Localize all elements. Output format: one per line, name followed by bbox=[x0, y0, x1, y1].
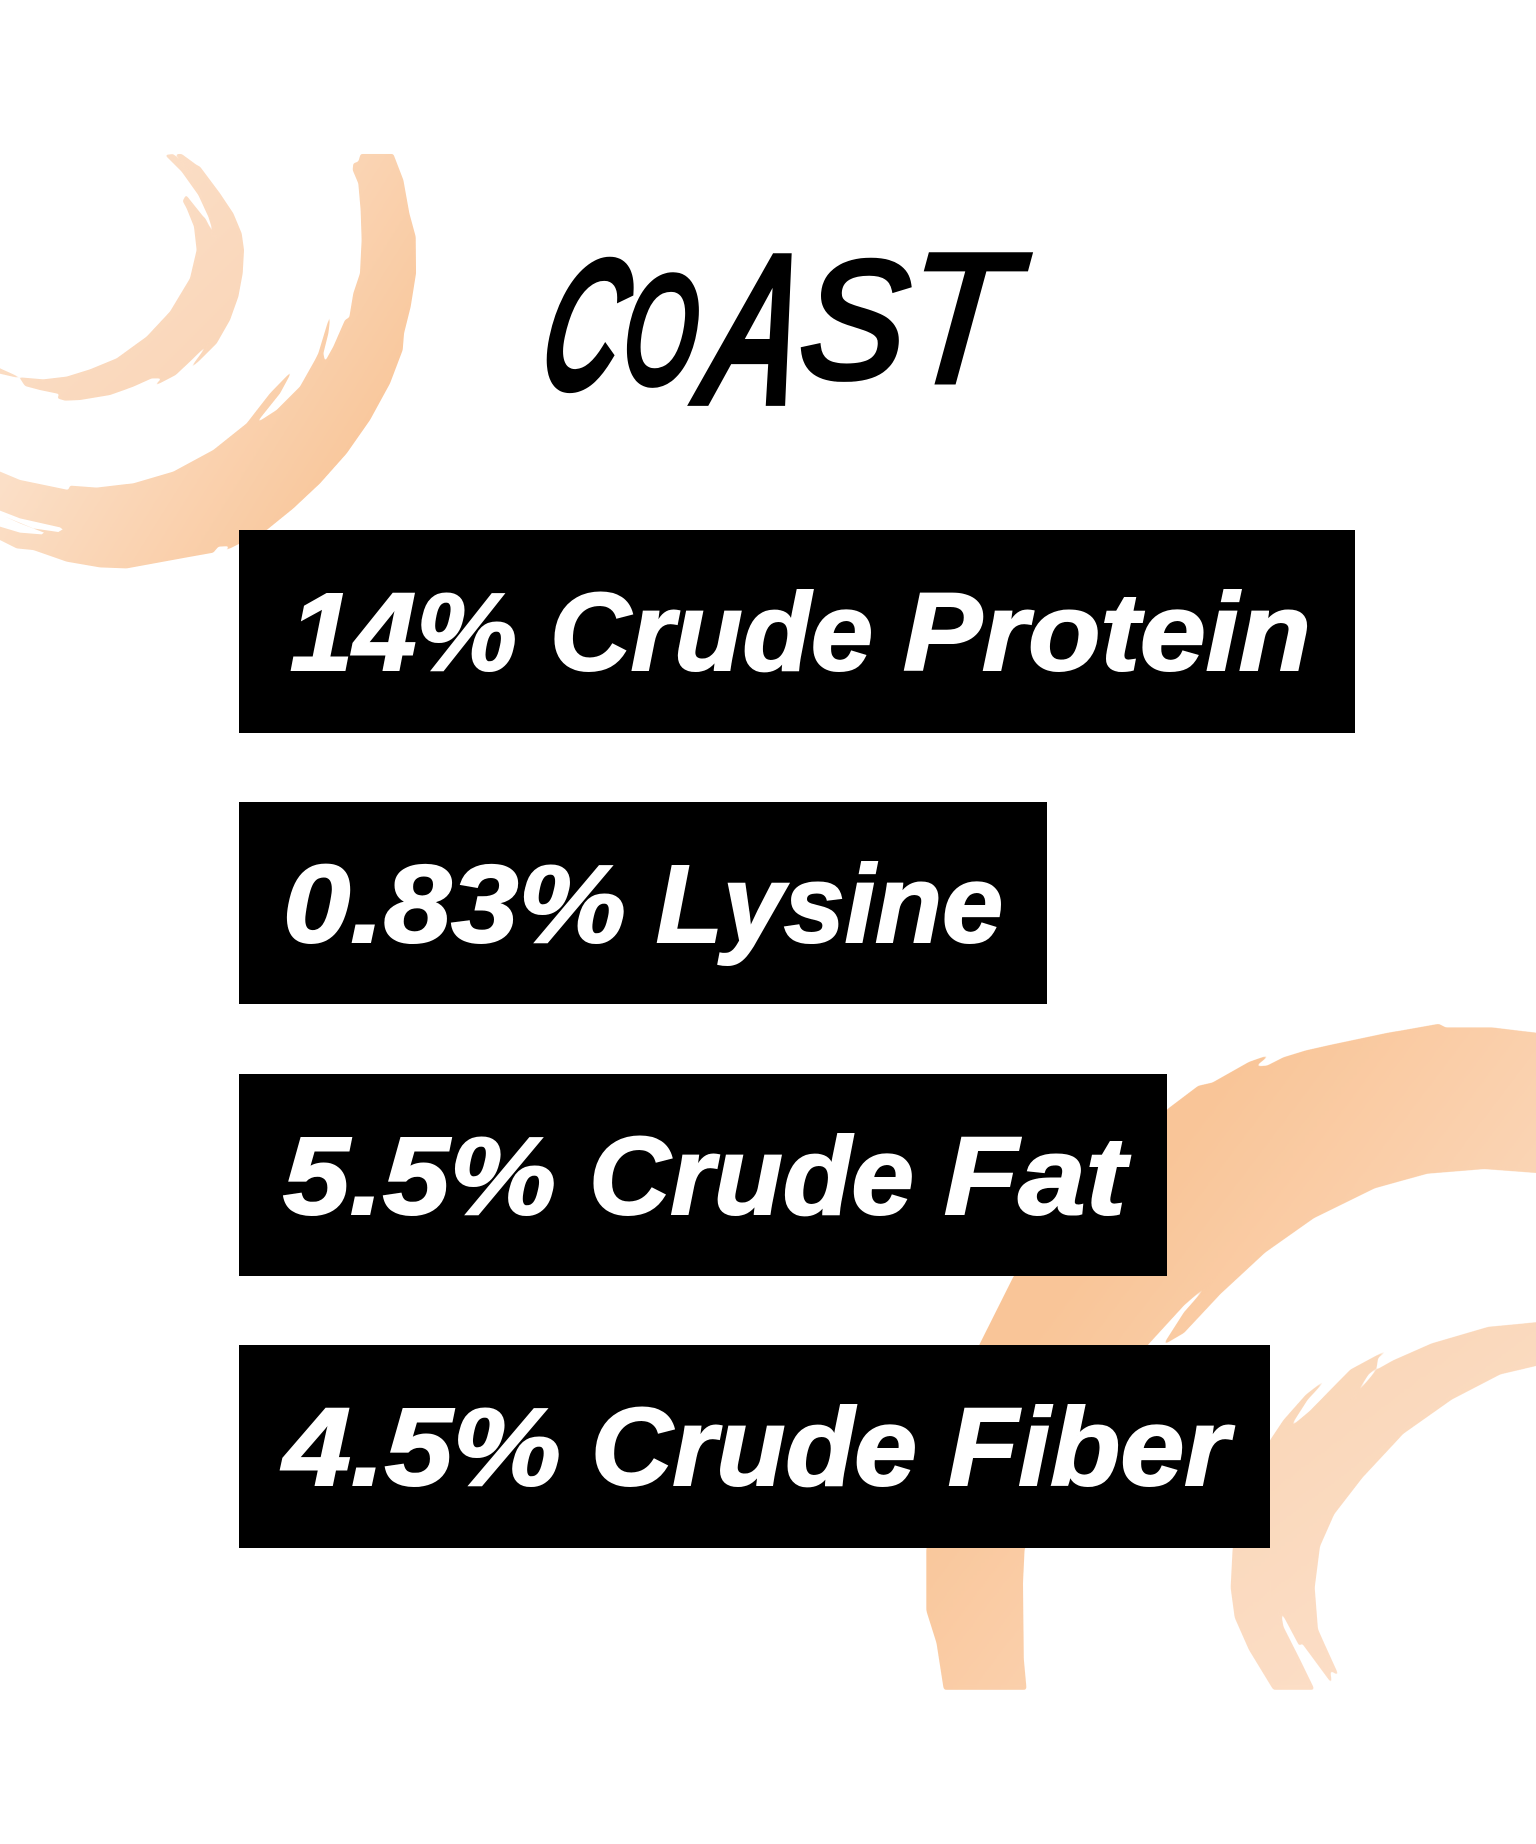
stat bar: 0.83% Lysine bbox=[239, 802, 1047, 1004]
stat bar: 14% Crude Protein: Protein bbox=[903, 571, 1311, 694]
stat bar: 4.5% Crude Fiber: Crude bbox=[591, 1386, 917, 1509]
stat bar: 5.5% Crude Fat: Fat bbox=[944, 1115, 1131, 1238]
brush arc: bottom-right outer bbox=[926, 1024, 1536, 1690]
stat bar: 14% Crude Protein: 14% bbox=[290, 571, 517, 694]
title: COAST: O bbox=[618, 247, 705, 415]
title: COAST: T bbox=[898, 216, 1023, 422]
title: COAST: A bbox=[692, 215, 822, 446]
stat bar: 4.5% Crude Fiber bbox=[239, 1345, 1270, 1548]
brush arc: top-left inner bbox=[0, 154, 244, 401]
stat bar: 5.5% Crude Fat: 5.5% bbox=[283, 1115, 556, 1238]
stat bar: 5.5% Crude Fat: Crude bbox=[589, 1115, 914, 1238]
stat bar: 5.5% Crude Fat bbox=[239, 1074, 1167, 1276]
title: COAST: S bbox=[794, 228, 915, 414]
stat bar: 14% Crude Protein: Crude bbox=[550, 571, 873, 694]
brush arc: top-left outer bbox=[0, 154, 416, 568]
title: COAST: C bbox=[528, 227, 644, 425]
stat bar: 0.83% Lysine: Lysine bbox=[656, 843, 1003, 966]
title: COAST bbox=[528, 215, 1034, 446]
stat bar: 0.83% Lysine: 0.83% bbox=[283, 843, 626, 966]
brush arc: bottom-right inner bbox=[1231, 1319, 1536, 1690]
stat bar: 4.5% Crude Fiber: 4.5% bbox=[281, 1386, 561, 1509]
stat bar: 4.5% Crude Fiber: Fiber bbox=[948, 1386, 1234, 1509]
stat bar: 14% Crude Protein bbox=[239, 530, 1355, 733]
